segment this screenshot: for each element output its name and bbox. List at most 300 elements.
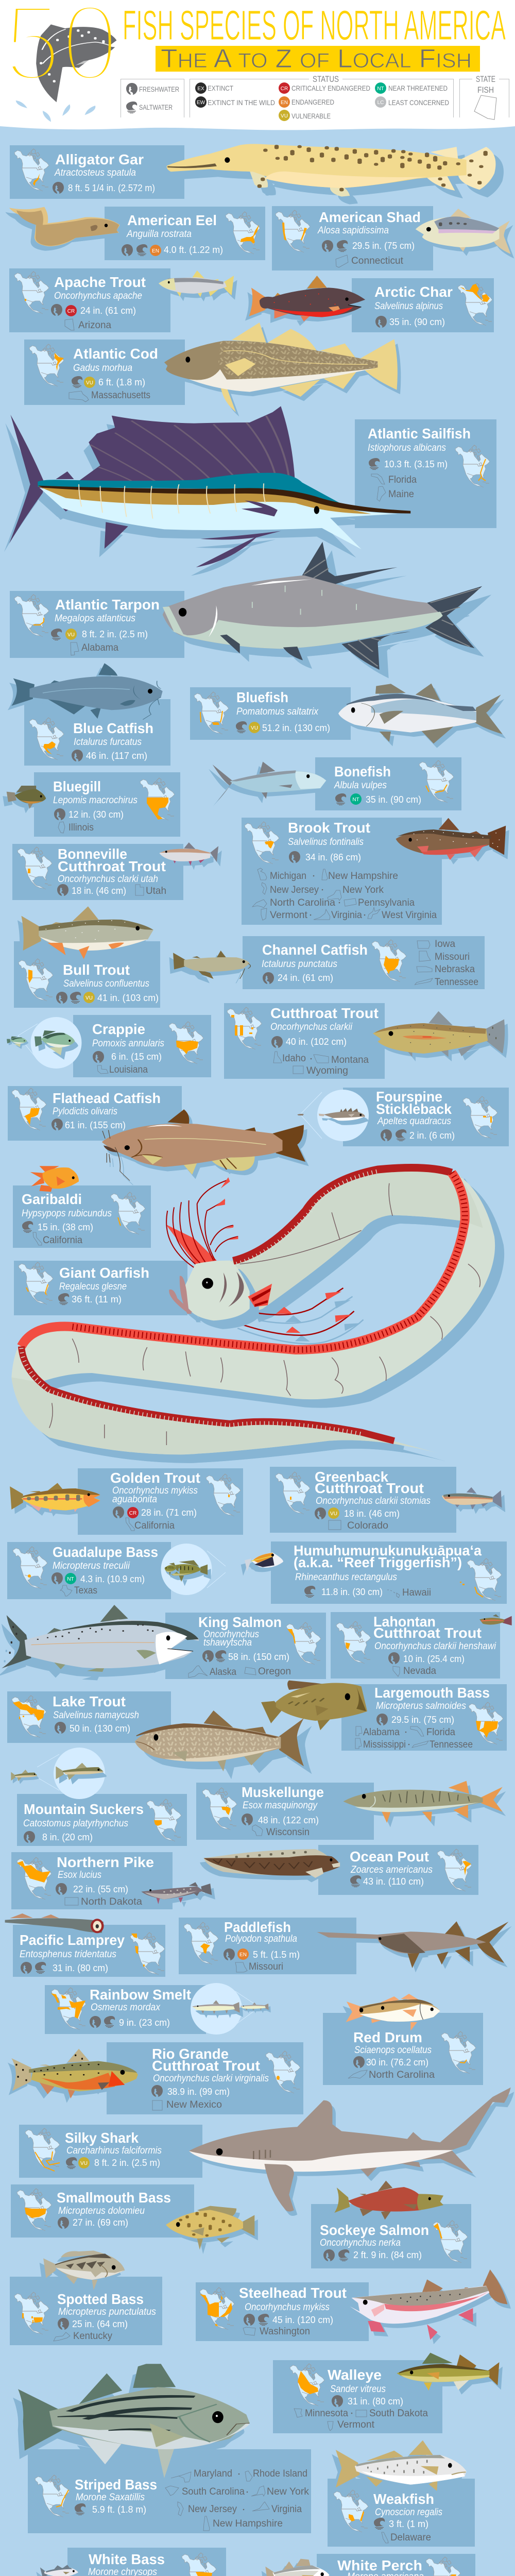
range map [441, 2031, 476, 2074]
size: 34 in. (86 cm) [305, 852, 361, 862]
size and status: 41 in. (103 cm) [97, 992, 159, 1003]
states: Vermont [270, 910, 308, 921]
panel: Garibaldi [13, 1166, 151, 1248]
states: Alabama [363, 1727, 400, 1738]
state [33, 1232, 82, 1246]
scientific name: Pylodictis olivaris [53, 1106, 117, 1117]
panel: Paddlefish [179, 1918, 508, 1974]
legend: state fish [459, 74, 509, 120]
size: 8 in. (20 cm) [42, 1832, 93, 1842]
scientific name: Pomatomus saltatrix [236, 706, 319, 717]
magnifier and fish: stickleback [297, 1090, 369, 1141]
panel: Atlantic Tarpon [10, 542, 482, 670]
size and status: 8 ft. 2 in. (2.5 m) [94, 2157, 160, 2168]
panel: Apache Trout [9, 268, 234, 332]
scientific name: Megalops atlanticus [55, 613, 135, 624]
size [90, 2016, 170, 2028]
panel: Lahontan Cutthroat Trout [331, 1612, 512, 1679]
size [322, 240, 415, 252]
panel: Steelhead Trout [196, 2269, 507, 2341]
fish: bluefish [338, 684, 503, 743]
panel: Atlantic Cod [24, 323, 398, 412]
heading line 2: Cutthroat Trout [373, 1625, 482, 1641]
legend: status: CRITICALLY ENDANGERED [291, 84, 370, 92]
size [54, 808, 124, 820]
size: 10 in. (25.4 cm) [403, 1653, 465, 1664]
size and status [51, 304, 136, 316]
size: 15 in. (38 cm) [38, 1222, 93, 1232]
range map [276, 1472, 310, 1514]
state [54, 2331, 112, 2342]
heading: Sockeye Salmon [320, 2222, 429, 2238]
range map [17, 1857, 52, 1900]
scientific name: Morone Saxatillis [76, 2492, 145, 2503]
states: Tennessee [435, 977, 478, 988]
state: California [43, 1235, 82, 1246]
scientific name: Lepomis macrochirus [53, 795, 138, 806]
panel: Atlantic Sailfish [9, 406, 496, 567]
size: 18 in. (46 cm) [72, 885, 126, 896]
range map [19, 959, 53, 1001]
size and status: NT [67, 1577, 74, 1582]
size: 29.5 in. (75 cm) [391, 1714, 454, 1725]
size [388, 1652, 465, 1664]
states [188, 1666, 291, 1677]
scientific name: Oncorhynchus apache [54, 291, 142, 301]
states: New Jersey [188, 2504, 237, 2515]
size: 48 in. (122 cm) [258, 1815, 319, 1825]
size: 43 in. (110 cm) [363, 1876, 424, 1887]
states: Maine [388, 489, 414, 500]
size [93, 1051, 162, 1063]
range map [182, 2553, 216, 2576]
state: Nevada [403, 1666, 436, 1676]
fish: reef triggerfish [245, 1552, 283, 1571]
range map [469, 1702, 503, 1744]
panel: White Bass [40, 2548, 226, 2576]
states: Tennessee [430, 1739, 473, 1750]
states [165, 2468, 309, 2531]
heading: Alligator Gar [55, 151, 144, 167]
icon: leaping fish [16, 24, 116, 122]
panel: Striped Bass [18, 2364, 311, 2533]
scientific name: Osmerus mordax [91, 2002, 161, 2013]
heading: White Bass [89, 2551, 165, 2567]
scientific name: Atractosteus spatula [54, 167, 136, 178]
heading line 2: Cutthroat Trout [58, 858, 166, 874]
panel: Brook Trout [242, 818, 506, 925]
size: 3 ft. (1 m) [389, 2518, 428, 2529]
state: Texas [74, 1585, 97, 1596]
state: California [134, 1520, 175, 1531]
scientific name: Oncorhynchus clarki utah [58, 874, 158, 885]
size: 12 in. (30 cm) [68, 809, 124, 820]
fish: steelhead trout [350, 2269, 507, 2340]
fish: arctic char [249, 276, 365, 321]
fish: king salmon [2, 1605, 199, 1672]
range map [29, 344, 64, 386]
scientific name: Ictalurus punctatus [262, 959, 337, 970]
panel: Muskellunge [196, 1781, 503, 1840]
states: Nebraska [435, 964, 475, 975]
heading line 2: Stickleback [376, 1101, 452, 1117]
heading: Crappie [92, 1021, 145, 1037]
panel: Greenback Cutthroat Trout [270, 1467, 502, 1533]
legend: habitat: FRESHWATER [139, 85, 179, 93]
heading: American Shad [319, 209, 421, 225]
heading: Bluegill [53, 778, 101, 794]
legend: status: LEAST CONCERNED [388, 98, 449, 107]
fish: ocean pout [203, 1849, 340, 1878]
legend: status: EN [281, 100, 288, 106]
heading: Paddlefish [224, 1919, 291, 1935]
fish: american eel [9, 207, 120, 246]
size [202, 1650, 289, 1662]
panel: Pacific Lamprey [5, 1913, 165, 1977]
size and status: EN [239, 1952, 247, 1958]
heading: Pacific Lamprey [20, 1932, 125, 1948]
size and status: VU [86, 380, 93, 386]
scientific name: Sander vitreus [330, 2384, 386, 2395]
range map [184, 1922, 218, 1964]
scientific name: Micropterus treculii [53, 1561, 130, 1571]
scientific name: Esox lucius [58, 1870, 101, 1880]
fish: sockeye salmon [334, 2181, 443, 2219]
scientific name: Oncorhynchus clarki virginalis [153, 2073, 269, 2084]
range map [140, 778, 175, 820]
heading: Bonneville [58, 846, 127, 862]
magnifier and fish: rainbow smelt [191, 1983, 269, 2035]
fish: bluegill [7, 786, 46, 809]
size and status: 8 ft. 2 in. (2.5 m) [82, 629, 148, 639]
panel: Mountain Suckers [11, 1748, 187, 1846]
range map [463, 1096, 497, 1139]
heading: Mountain Suckers [24, 1801, 144, 1817]
heading: Fourspine [376, 1089, 442, 1105]
panel: Golden Trout [10, 1468, 243, 1535]
fish: atlantic tarpon [163, 542, 482, 670]
scientific name: Catostomus platyrhynchus [23, 1818, 128, 1829]
panel: Smallmouth Bass [11, 2184, 254, 2250]
range map [35, 2475, 70, 2517]
panel: Flathead Catfish [8, 1086, 305, 1181]
size: 2 ft. 9 in. (84 cm) [353, 2249, 422, 2260]
scientific name: Salvelinus namaycush [53, 1710, 139, 1721]
panel: Alligator Gar [10, 144, 495, 199]
range map [227, 1007, 262, 1049]
size and status [315, 1507, 400, 1519]
states: West Virginia [382, 910, 437, 921]
legend: status: VU [281, 113, 288, 119]
size and status [113, 1506, 197, 1518]
fish: muskellunge [344, 1781, 503, 1823]
heading: Arctic Char [374, 284, 453, 300]
heading: Atlantic Cod [73, 346, 158, 362]
heading: Greenback [315, 1469, 388, 1485]
size: 10.3 ft. (3.15 m) [384, 459, 448, 469]
heading: Bull Trout [63, 962, 130, 978]
panel: Northern Pike [11, 1852, 212, 1909]
size [75, 2503, 146, 2515]
range map [419, 760, 454, 803]
fish: northern pike [141, 1882, 212, 1904]
heading: Northern Pike [57, 1854, 154, 1870]
size and status: 51.2 in. (130 cm) [262, 722, 330, 733]
size: 11.8 in. (30 cm) [321, 1586, 383, 1597]
size and status: VU [67, 632, 75, 638]
fish: channel catfish [173, 951, 250, 979]
scientific name: Entosphenus tridentatus [20, 1949, 116, 1960]
panel: American Shad [272, 206, 511, 270]
size and status [52, 1572, 145, 1584]
size: 5.9 ft. (1.8 m) [92, 2504, 146, 2515]
fish: bonefish [213, 761, 326, 802]
range map [226, 212, 260, 254]
fish: spotted bass [43, 2250, 125, 2290]
panel: Walleye [273, 2353, 499, 2433]
scientific name: Oncorhynchus clarkii henshawi [374, 1641, 496, 1652]
fish: greenback trout [442, 1487, 502, 1510]
size and status: VU [85, 995, 93, 1001]
heading: Channel Catfish [262, 942, 368, 958]
panel: Bluegill [7, 772, 180, 837]
size: 24 in. (61 cm) [278, 972, 333, 983]
fish: smallmouth bass [166, 2206, 254, 2250]
fish: pacific lamprey [5, 1913, 104, 1933]
panel: Bonefish [213, 757, 461, 810]
scientific name: Sciaenops ocellatus [354, 2045, 432, 2056]
fish: walleye [397, 2353, 499, 2391]
size: 36 ft. (11 m) [72, 1294, 122, 1304]
range map [455, 445, 490, 487]
panel: Rainbow Smelt [45, 1983, 269, 2035]
fish: blue catfish [11, 663, 163, 720]
size and status [66, 2157, 160, 2169]
state: North Carolina [369, 2070, 435, 2080]
state [60, 1585, 97, 1596]
heading: Walleye [328, 2367, 382, 2383]
states: Florida [426, 1727, 455, 1738]
size: 58 in. (150 cm) [228, 1651, 289, 1662]
scientific name: Micropterus dolomieu [58, 2206, 145, 2216]
size and status: 18 in. (46 cm) [344, 1508, 400, 1519]
state [235, 1961, 283, 1972]
panel: Arctic Char [249, 276, 494, 332]
fish: largemouth bass [261, 1681, 367, 1730]
state: Delaware [390, 2532, 431, 2543]
range map [12, 1088, 46, 1130]
state: Washington [260, 2326, 310, 2337]
state [58, 822, 94, 833]
scientific name: Cynoscion regalis [375, 2507, 442, 2518]
fish: alligator gar [167, 144, 495, 197]
fish: bonneville trout [159, 842, 218, 866]
state [387, 1587, 431, 1598]
size: 31 in. (80 cm) [348, 2396, 403, 2406]
panel: Red Drum [323, 1994, 483, 2085]
panel: Largemouth Bass [261, 1681, 507, 1751]
range map [458, 283, 492, 326]
states: Michigan [270, 871, 306, 882]
legend: status: STATUS [313, 74, 339, 84]
scientific name: Regalecus glesne [59, 1281, 127, 1292]
panel: American Eel [9, 207, 265, 260]
size and status: VU [251, 725, 258, 731]
size [323, 2249, 422, 2261]
size: 50 in. (130 cm) [70, 1723, 130, 1734]
scientific name: aguabonita [112, 1494, 157, 1505]
panel: Silky Shark [19, 2088, 511, 2211]
fish: apache trout [159, 270, 234, 297]
fish: silky shark [189, 2088, 511, 2211]
size and status [122, 244, 223, 256]
heading: Lake Trout [53, 1693, 126, 1709]
states: Idaho [282, 1053, 306, 1064]
heading: Rainbow Smelt [90, 1987, 191, 2003]
legend: status: NT [377, 86, 384, 92]
legend: status: EW [197, 100, 205, 106]
scientific name [112, 1485, 198, 1505]
state: Colorado [347, 1520, 388, 1531]
heading line 2: Cutthroat Trout [315, 1480, 424, 1496]
panel: Bull Trout [14, 906, 160, 1008]
legend: status: ENDANGERED [291, 98, 334, 106]
states: Iowa [435, 939, 455, 950]
magnifier and fish: mountain sucker [11, 1748, 105, 1799]
range map [336, 1621, 371, 1664]
scientific name: Hypsypops rubicundus [22, 1208, 112, 1219]
size and status: NT [352, 797, 359, 803]
legend: state fish: FISH [477, 85, 494, 95]
heading: Blue Catfish [73, 720, 153, 736]
state [126, 1518, 175, 1531]
heading: Largemouth Bass [374, 1685, 490, 1701]
heading: Bonefish [334, 764, 391, 779]
size and status [72, 376, 145, 388]
scientific name: Salvelinus fontinalis [288, 837, 364, 848]
range map [286, 1622, 321, 1665]
legend: status: NEAR THREATENED [388, 84, 448, 92]
scientific name: Ictalurus furcatus [74, 737, 142, 748]
scientific name: Apeltes quadracus [377, 1116, 451, 1127]
state [71, 642, 118, 655]
heading: Silky Shark [65, 2130, 139, 2146]
legend: status [190, 74, 453, 121]
fish: atlantic cod [164, 323, 398, 412]
range map [433, 2221, 468, 2263]
legend: habitat [121, 79, 184, 117]
state: Illinois [68, 822, 94, 833]
scientific name: Oncorhynchus mykiss [112, 1485, 198, 1496]
state: Connecticut [351, 256, 404, 266]
range map [437, 1849, 472, 1891]
size and status [51, 629, 148, 640]
range map [14, 595, 49, 637]
states [415, 939, 478, 988]
range map [202, 1788, 237, 1830]
legend: status: EXTINCT [208, 84, 233, 92]
fish: bull trout [21, 906, 153, 959]
panel: Fourspine Stickleback [297, 1088, 509, 1146]
states: New Hampshire [213, 2518, 283, 2529]
scientific name: Anguilla rostrata [126, 229, 192, 240]
size [381, 1129, 455, 1141]
size and status: 4.0 ft. (1.22 m) [164, 244, 223, 255]
states [294, 2408, 428, 2431]
fish: lake trout [134, 1710, 304, 1771]
panel: Weakfish [328, 2441, 475, 2547]
state: Wisconsin [266, 1827, 310, 1838]
fish: american shad [416, 209, 511, 254]
range map [19, 1262, 53, 1304]
heading: Apache Trout [54, 274, 146, 290]
scientific name: Oncorhynchus mykiss [245, 2302, 330, 2313]
states: South Dakota [369, 2408, 428, 2419]
size and status: 35 in. (90 cm) [366, 794, 421, 805]
size: 46 in. (117 cm) [86, 750, 147, 761]
states: North Carolina [270, 897, 335, 908]
panel: Bluefish [190, 684, 503, 743]
scientific name: Oncorhynchus [203, 1629, 259, 1640]
states: Wyoming [306, 1065, 348, 1076]
states: Florida [388, 474, 417, 485]
heading: Atlantic Tarpon [55, 597, 160, 613]
panel: Ocean Pout [203, 1845, 478, 1895]
heading: Cutthroat Trout [270, 1005, 379, 1021]
heading: Striped Bass [75, 2477, 157, 2493]
size and status: 28 in. (71 cm) [141, 1507, 197, 1518]
state: New Mexico [166, 2099, 222, 2110]
scientific name: Zoarces americanus [350, 1865, 433, 1875]
size [242, 1814, 319, 1825]
states: Virginia [271, 2504, 302, 2515]
fish: rio grande trout [11, 2049, 138, 2098]
size [56, 1883, 128, 1895]
heading: Humuhumunukunukuāpua‘a [294, 1543, 482, 1558]
heading: King Salmon [198, 1614, 282, 1630]
range map [200, 2287, 234, 2330]
size [263, 972, 333, 984]
range map [18, 847, 52, 889]
size: 45 in. (120 cm) [272, 2314, 333, 2325]
fish: white bass [40, 2565, 78, 2576]
range map [25, 2128, 60, 2171]
heading: Ocean Pout [350, 1849, 429, 1865]
legend: status: EXTINCT IN THE WILD [208, 98, 275, 107]
state [69, 390, 150, 402]
range map [12, 1696, 46, 1738]
size [374, 2518, 428, 2530]
state: Kentucky [73, 2331, 112, 2342]
state [329, 1520, 388, 1531]
range map [13, 1547, 47, 1589]
state: Utah [146, 886, 166, 896]
scientific name: Micropterus punctulatus [58, 2307, 156, 2317]
states: Maryland [194, 2468, 232, 2479]
state [135, 885, 166, 896]
panel: Sockeye Salmon [311, 2181, 471, 2268]
range map [51, 1988, 86, 2030]
states [273, 1052, 369, 1076]
fish: flathead catfish [102, 1109, 305, 1181]
range map [130, 1933, 165, 1975]
size: 25 in. (64 cm) [72, 2318, 128, 2329]
heading: Weakfish [373, 2491, 434, 2507]
size: 2 in. (6 cm) [409, 1130, 455, 1141]
fish: cutthroat trout [373, 1011, 505, 1057]
scientific name: tshawytscha [203, 1637, 252, 1648]
legend: status: LC [377, 100, 384, 106]
